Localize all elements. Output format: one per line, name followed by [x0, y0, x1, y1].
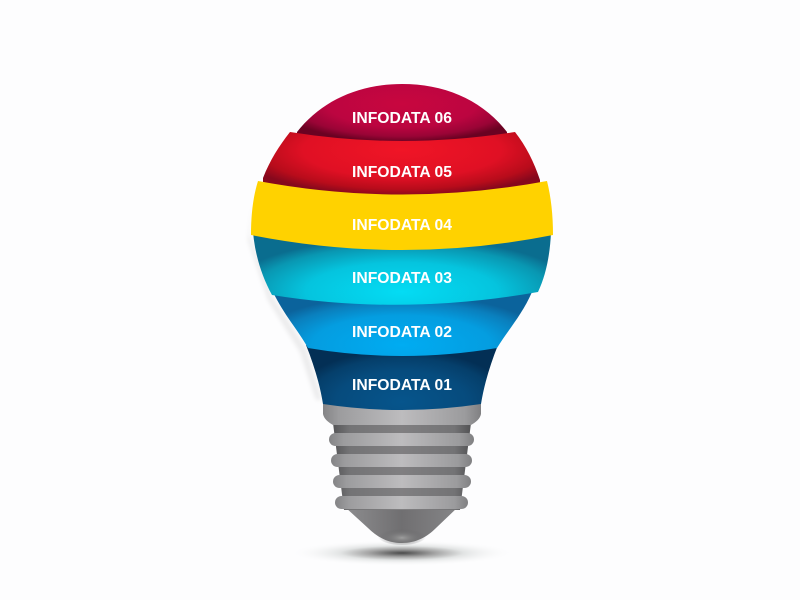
segment 06 — [297, 84, 507, 145]
soft shadow behind bulb — [248, 200, 322, 400]
base tip — [378, 527, 426, 545]
screw base — [323, 402, 481, 545]
base rings — [329, 433, 474, 509]
label 04: INFODATA 04 — [352, 217, 452, 234]
label 02: INFODATA 02 — [352, 324, 452, 341]
base collar — [323, 402, 481, 425]
label 03: INFODATA 03 — [352, 270, 452, 287]
label 06: INFODATA 06 — [352, 110, 452, 127]
base threads — [333, 423, 471, 510]
label 05: INFODATA 05 — [352, 164, 452, 181]
segment 05 — [263, 132, 540, 200]
ground shadow — [290, 540, 514, 566]
segment 04 — [251, 181, 553, 250]
base cone — [345, 507, 458, 543]
segment 03 — [253, 232, 551, 305]
label 01: INFODATA 01 — [352, 377, 452, 394]
segment 01 — [306, 345, 498, 410]
segment 02 — [273, 292, 532, 356]
